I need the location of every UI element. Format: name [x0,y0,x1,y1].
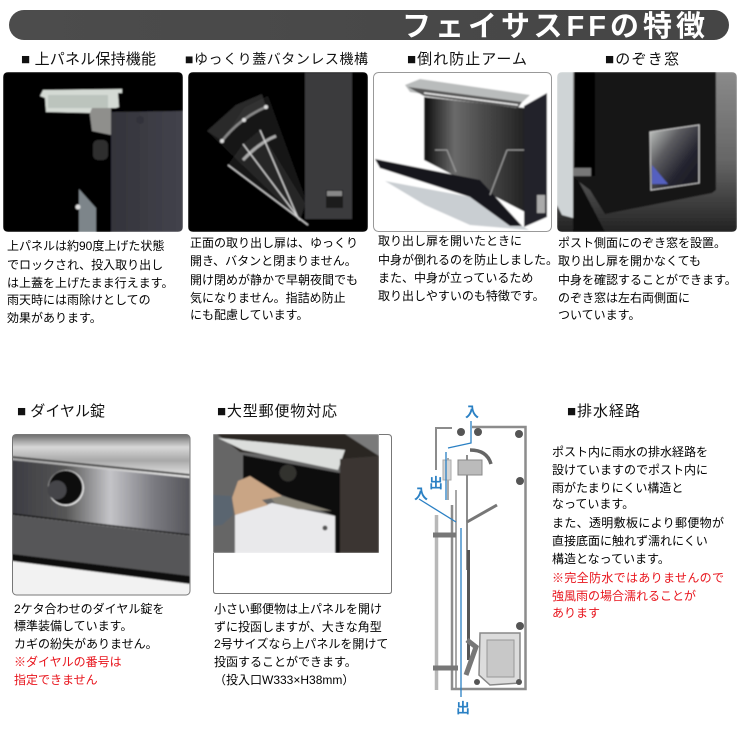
text: dial lock [14,601,164,687]
text: upper panel hold [7,238,173,325]
text: slow-closing door: にも配慮しています。 [190,308,308,322]
text: drainage route: 設けていますのでポスト内に [552,463,708,477]
diagram: drainage cross-section: 入 [465,404,479,420]
text: drainage route: ※完全防水ではありませんので [552,570,724,585]
text: anti-tip arm: 取り出しやすいのも特徴です。 [378,288,545,303]
text: upper panel hold: でロックされ、投入取り出し [7,257,163,272]
text: upper panel hold: は上蓋を上げたまま行えます。 [7,276,173,290]
text: dial lock: 2ケタ合わせのダイヤル錠を [14,601,164,616]
text: dial lock: カギの紛失がありません。 [14,636,158,651]
text: anti-tip arm: 中身が倒れるのを防止しました。 [378,252,558,267]
text: large mail: （投入口W333×H38mm） [214,672,354,687]
photo: large mail [213,434,392,594]
photo: anti-tip arm [373,72,552,232]
title banner [9,10,729,43]
diagram: drainage cross-section: 出 [456,700,470,716]
text: peep window [558,236,737,322]
text: drainage route: また、透明敷板により郵便物が [552,515,724,530]
diagram: drainage cross-section: 出 [429,475,443,491]
text: drainage route: 直接底面に触れず濡れにくい [552,533,708,548]
text: peep window: ついています。 [558,308,640,322]
text: upper panel hold: 雨天時には雨除けとしての [7,293,151,307]
text: large mail: 2号サイズなら上パネルを開けて [214,636,388,651]
heading: anti-tip arm: ■倒れ防止アーム [407,51,527,68]
heading: large mail: ■大型郵便物対応 [217,403,337,420]
text: dial lock: ※ダイヤルの番号は [14,654,122,669]
heading: drainage route: ■排水経路 [567,403,640,420]
photo: peep window [557,72,737,232]
text: slow-closing door: 正面の取り出し扉は、ゆっくり [190,236,358,250]
text: large mail: 小さい郵便物は上パネルを開け [214,602,382,616]
text: dial lock: 標準装備しています。 [14,618,132,633]
heading: peep window: ■のぞき窓 [605,51,679,68]
text: dial lock: 指定できません [14,672,98,687]
text: upper panel hold: 効果があります。 [7,310,102,325]
text: peep window: のぞき窓は左右両側面に [558,290,690,305]
text: drainage route [552,444,724,620]
text: slow-closing door: 開け閉めが静かで早朝夜間でも [190,272,358,287]
text: anti-tip arm: また、中身が立っているため [378,270,533,285]
photo: upper panel hold [3,72,183,232]
text: drainage route: ポスト内に雨水の排水経路を [552,444,708,459]
text: upper panel hold: 上パネルは約90度上げた状態 [7,238,164,253]
photo: slow-closing door [188,72,368,232]
diagram: drainage cross-section [414,404,526,716]
text: peep window: 中身を確認することができます。 [558,272,737,287]
title banner: フェイサスFFの特徴 [402,10,705,43]
text: anti-tip arm: 取り出し扉を開いたときに [378,234,522,248]
text: drainage route: なっています。 [552,497,634,511]
text: drainage route: 雨がたまりにくい構造と [552,480,683,495]
photo: dial lock [12,434,190,595]
text: anti-tip arm [378,234,558,303]
text: large mail [214,602,388,687]
text: peep window: 取り出し扉を開かなくても [558,254,701,268]
text: drainage route: 構造となっています。 [552,552,670,566]
text: slow-closing door: 開き、バタンと閉まりません。 [190,254,357,268]
text: large mail: 投函することができます。 [214,654,357,669]
text: large mail: ずに投函しますが、大きな角型 [214,619,382,634]
text: peep window: ポスト側面にのぞき窓を設置。 [558,236,726,250]
text: slow-closing door: 気になりません。指詰め防止 [190,290,346,305]
heading: slow lid: ■ゆっくり蓋バタンレス機構 [185,51,368,67]
heading: upper panel hold: ■ 上パネル保持機能 [21,51,156,68]
text: drainage route: あります [552,606,600,620]
text: drainage route: 強風雨の場合濡れることが [552,588,696,603]
diagram: drainage cross-section: 入 [414,486,428,502]
heading: dial lock: ■ ダイヤル錠 [17,403,105,420]
text: slow-closing door [190,236,358,322]
